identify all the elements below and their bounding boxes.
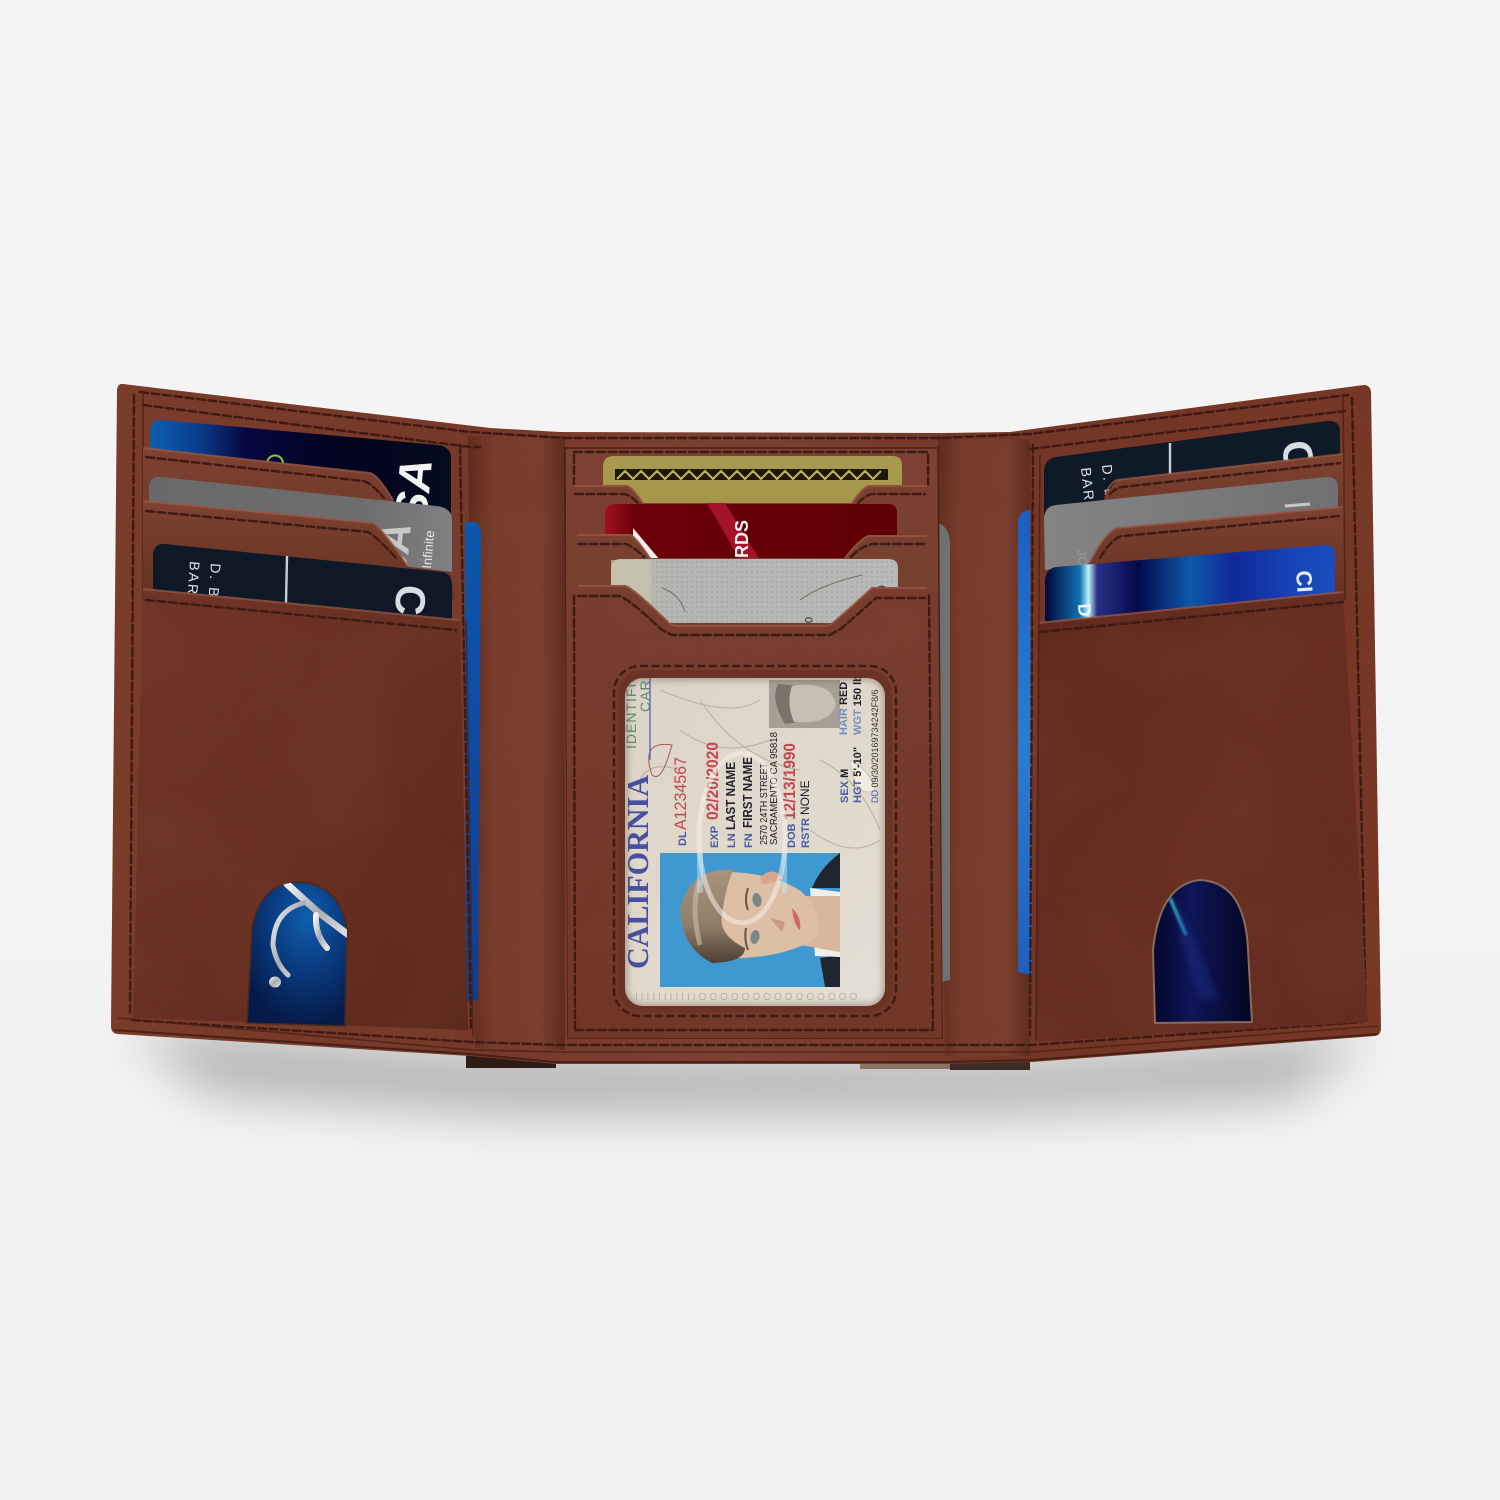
panel: centre: [560, 448, 950, 1042]
outer stitching: [118, 392, 1378, 1052]
licence details: HGT 5'-10": [852, 747, 864, 803]
card: silver ID: 6: [875, 585, 887, 591]
slot flap 2: [143, 501, 455, 600]
licence heading: [626, 678, 650, 968]
portrait thumbnail: [769, 680, 840, 728]
card: gold: [603, 456, 902, 510]
card: red rewards: [605, 503, 897, 565]
centre stitching: [574, 452, 932, 1030]
wallet underside details: [466, 1050, 1030, 1070]
card: bright blue: D: [1074, 603, 1095, 617]
card: bright blue: [1045, 545, 1335, 630]
thumb notch with antler logo: [247, 882, 350, 1026]
slot flap 2: [1050, 507, 1344, 600]
hologram ring: [697, 753, 787, 923]
wallet: [100, 375, 1400, 1075]
right spine: [938, 436, 1030, 1056]
card: silver ID: [611, 559, 898, 630]
licence details: FN: [743, 833, 755, 848]
bottom edge highlight: [114, 1030, 1378, 1062]
card: silver ID: 06: [802, 617, 814, 629]
leather body: [111, 384, 1381, 1064]
blue card sliver right: [1018, 510, 1032, 975]
card: bright blue: CI: [1291, 570, 1317, 593]
card: dark with name: [153, 544, 452, 620]
blue card sliver left: [465, 522, 481, 1002]
grey card sliver centre: [937, 523, 950, 982]
licence details: FIRST NAME: [740, 757, 755, 828]
licence details: SACRAMENTO CA 95818: [769, 732, 780, 845]
panel: left front pocket: [130, 445, 473, 1036]
licence details: [671, 675, 880, 848]
ID window: [614, 625, 896, 1016]
card: gold: 7: [759, 502, 775, 510]
microprint strip: IIIIIIIIIIIOOOOOOOOOOOOOOO: [635, 992, 860, 1003]
licence details: WGT 150 lb: [852, 675, 864, 735]
panel: left card slots: [143, 420, 455, 622]
licence details: LN: [726, 833, 738, 848]
card: dark with name: D. E: [1099, 464, 1119, 500]
driver licence: [625, 678, 885, 1006]
licence heading: CARD: [637, 668, 653, 712]
card: red rewards: RDS: [732, 520, 752, 558]
licence details: EXP: [709, 826, 721, 848]
licence details: HAIR RED: [838, 682, 850, 735]
centre back panel: [565, 448, 942, 1038]
card: grey Visa Infinite: [149, 476, 452, 572]
card: dark with name: C: [1273, 438, 1323, 473]
card: dark with name: [1044, 421, 1340, 520]
panel: right card slots: [1044, 421, 1344, 630]
card: dark with name: C: [386, 583, 435, 617]
licence details: SEX M: [839, 769, 851, 803]
centre front pocket: [560, 580, 950, 1042]
card: grey: JO: [1074, 549, 1091, 567]
licence details: 2570 24TH STREET: [759, 763, 770, 845]
card: grey Visa Infinite: VISA: [365, 521, 420, 622]
licence heading: CALIFORNIA: [620, 774, 655, 969]
card: dark with name: BAR: [1078, 467, 1098, 503]
licence details: A1234567: [671, 757, 690, 830]
panel: right front pocket: [1030, 445, 1375, 1045]
licence details: LAST NAME: [723, 762, 738, 830]
licence details: NONE: [798, 780, 812, 815]
licence details: DL: [677, 831, 689, 846]
slot flap upper: [566, 485, 936, 560]
thumb notch right: [1153, 880, 1252, 1023]
licence details: DOB: [786, 824, 798, 848]
card: grey: [1044, 477, 1338, 570]
wallet drop shadow: [130, 1030, 1370, 1110]
slot flap 1: [1092, 454, 1344, 560]
licence heading: IDENTIFICATION: [623, 625, 639, 749]
card: dark with name: BAR: [185, 561, 203, 597]
portrait photo: [660, 853, 840, 987]
card: dark with name: D. B: [206, 563, 224, 599]
card: Visa dark blue: VISA: [381, 456, 442, 568]
card: grey Visa Infinite: Infinite: [419, 530, 437, 569]
licence details: 02/20/2020: [703, 742, 722, 820]
card: Visa dark blue: [150, 420, 451, 514]
slot flap lower: [566, 534, 936, 600]
slot flap 1: [143, 448, 455, 600]
body leather grain: [100, 375, 1400, 1075]
licence details: 12/13/1990: [780, 743, 799, 820]
left spine: [468, 436, 565, 1050]
licence details: DD 09/30/20169734242F8/6: [870, 689, 880, 803]
licence details: RSTR: [800, 818, 812, 848]
